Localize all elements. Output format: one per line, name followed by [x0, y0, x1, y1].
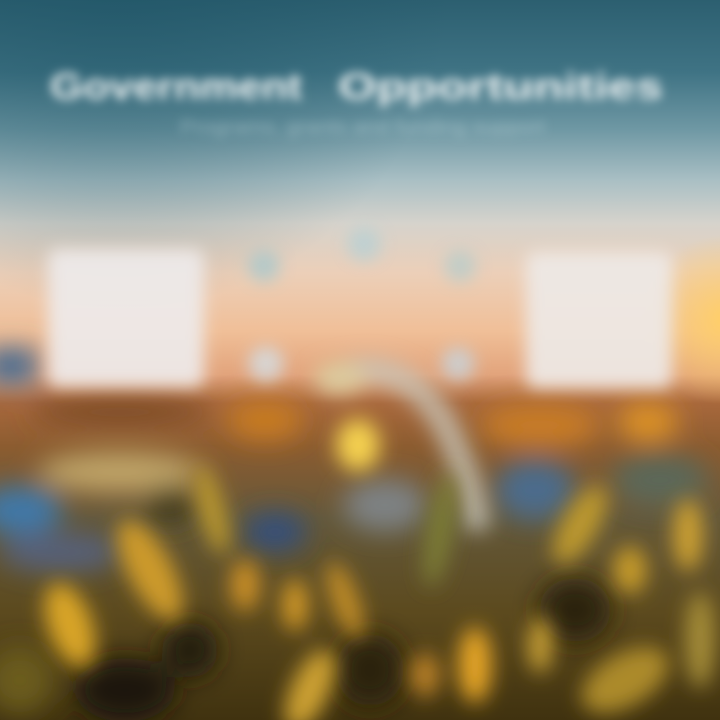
foreground wheat field: [34, 462, 715, 720]
horizon landscape: [0, 348, 708, 720]
title: Opportunities: [338, 66, 663, 107]
panel: right card: [526, 252, 672, 388]
panel: left card: [48, 249, 204, 387]
subtitle: Programs, grants and funding support: [180, 117, 545, 137]
title: [50, 66, 663, 107]
icons: center row: [248, 227, 476, 382]
title: Government: [50, 66, 302, 107]
central glass form with light: [314, 362, 478, 530]
